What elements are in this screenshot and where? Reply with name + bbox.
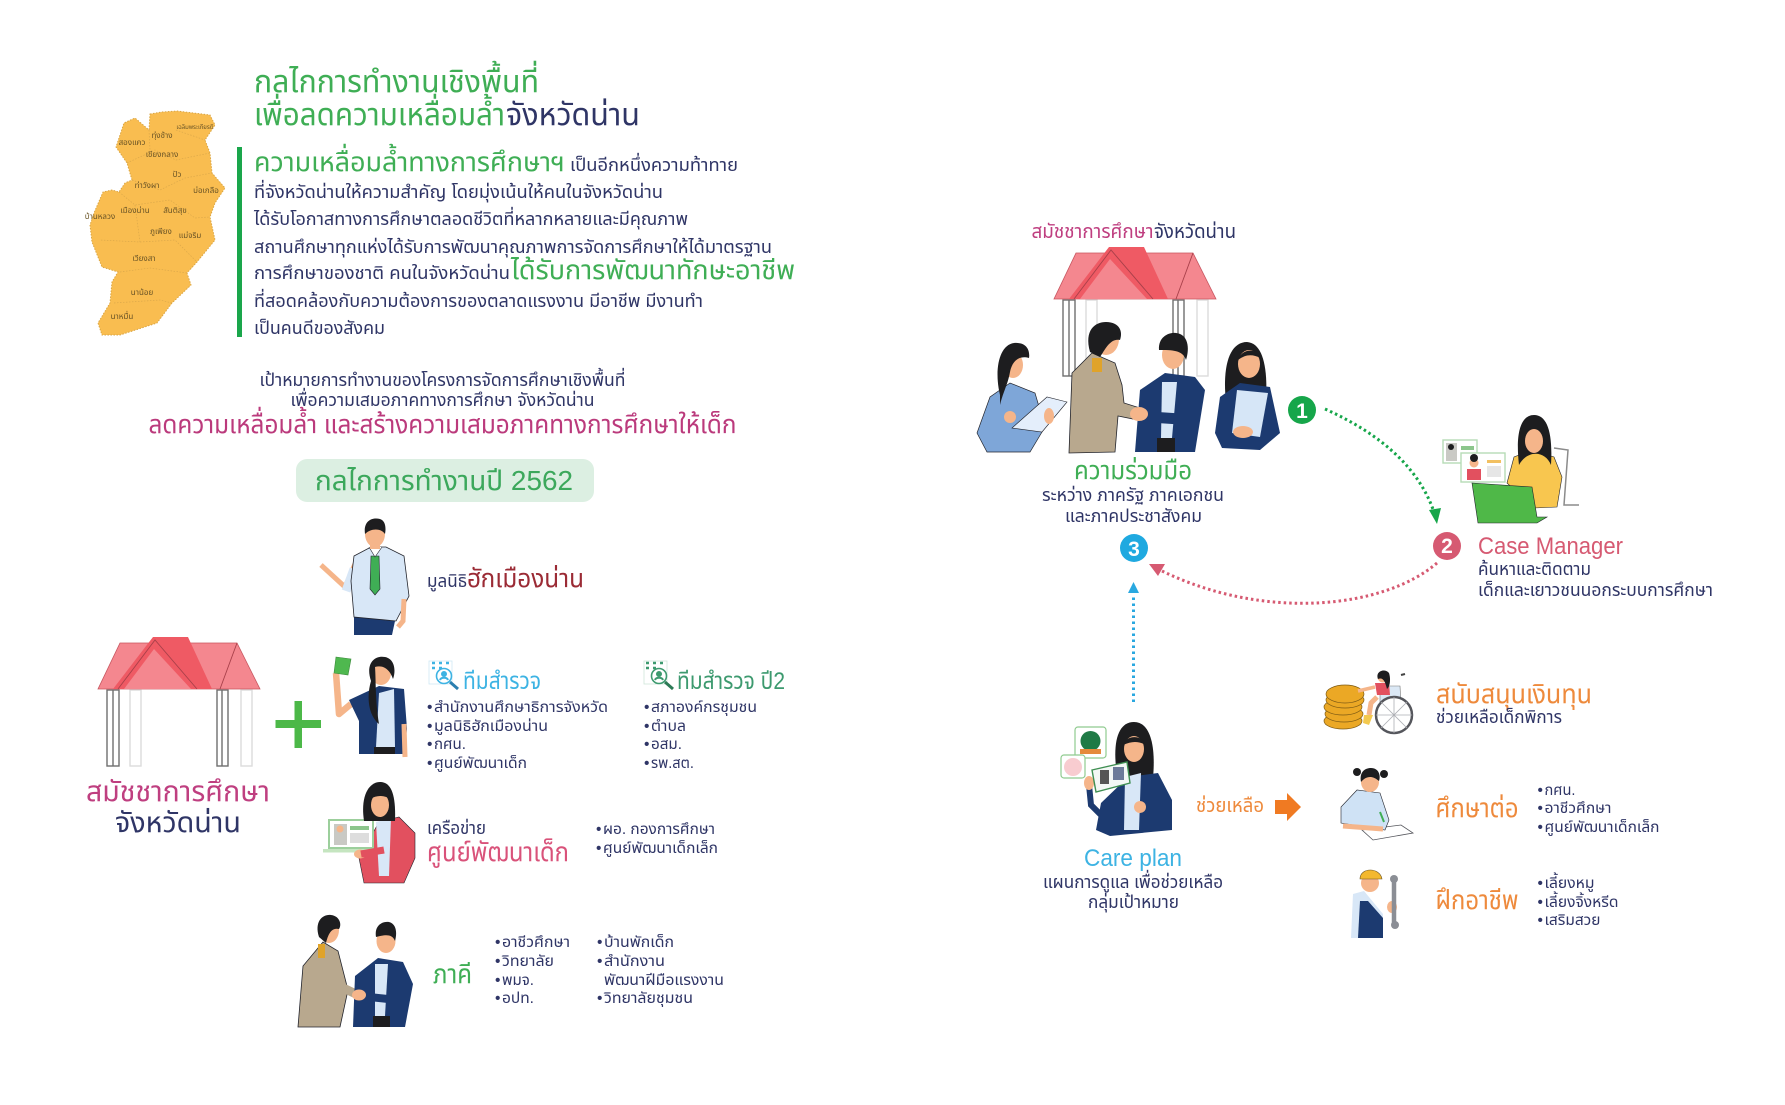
- goal statement: เป้าหมายการทำงานของโครงการจัดการศึกษาเชิงพื้นที่: [260, 367, 626, 390]
- text: child development center network: ศูนย์พัฒนาเด็ก: [427, 837, 569, 868]
- text: partners: •: [597, 934, 602, 951]
- text: collaboration: ระหว่าง ภาครัฐ ภาคเอกชน: [1042, 485, 1224, 505]
- person: foundation man: [321, 518, 409, 635]
- assembly label: [86, 776, 270, 839]
- text: partners: อาชีวศึกษา: [502, 934, 570, 951]
- label and arrow: help: ช่วยเหลือ: [1196, 794, 1264, 817]
- text: partners: พัฒนาฝีมือแรงงาน: [604, 972, 724, 989]
- text: partners: •: [495, 990, 500, 1007]
- text: collaboration: และภาคประชาสังคม: [1065, 506, 1202, 526]
- intro paragraph: เป็นคนดีของสังคม: [254, 318, 385, 338]
- person: woman with green card: [334, 657, 407, 757]
- icon: studying girl: [1341, 768, 1413, 840]
- title: เพื่อลดความเหลื่อมล้ำ: [254, 93, 505, 132]
- intro paragraph: ได้รับโอกาสทางการศึกษาตลอดชีวิตที่หลากหลายและมีคุณภาพ: [253, 206, 688, 230]
- map: Nan province districts: เชียงกลาง: [146, 149, 178, 159]
- text: collaboration: [1042, 455, 1224, 526]
- text: Hak Mueang Nan foundation: ฮักเมืองน่าน: [467, 563, 584, 593]
- survey team column 1: ศูนย์พัฒนาเด็ก: [434, 754, 527, 772]
- text: case manager: [1478, 533, 1713, 600]
- map: Nan province districts: เวียงสา: [132, 253, 156, 263]
- text: partners: •: [495, 972, 500, 989]
- intro paragraph: สถานศึกษาทุกแห่งได้รับการพัฒนาคุณภาพการจัดการศึกษาให้ได้มาตรฐาน: [254, 237, 772, 258]
- text: partners: •: [495, 934, 500, 951]
- intro paragraph: [253, 143, 795, 338]
- text: partners: อปท.: [502, 990, 534, 1007]
- heading: provincial assembly: [1032, 220, 1236, 243]
- map: Nan province districts: นาหมื่น: [111, 310, 133, 321]
- text: vocational training: •: [1538, 894, 1543, 911]
- arrow: step 2 to step 3: [1149, 563, 1437, 603]
- text: care plan: Care plan: [1084, 845, 1182, 872]
- survey team column 1: กศน.: [434, 736, 466, 753]
- text: continue studying: •: [1538, 819, 1543, 836]
- intro paragraph: การศึกษาของชาติ คนในจังหวัดน่าน: [254, 263, 510, 283]
- survey team column 2: •: [644, 755, 649, 772]
- person: woman with laptop: [323, 782, 415, 883]
- text: partners: [433, 933, 724, 1007]
- survey team column 2: ตำบล: [651, 718, 686, 735]
- title: กลไกการทำงานเชิงพื้นที่: [254, 60, 539, 99]
- text: partners: พมจ.: [502, 972, 534, 989]
- person: woman with clipboard: [977, 343, 1067, 452]
- map: Nan province districts: เฉลิมพระเกียรติ: [176, 124, 214, 131]
- survey team column 2: •: [644, 718, 649, 735]
- survey team column 1: •: [427, 699, 432, 716]
- icon: plus: [276, 701, 321, 748]
- survey team column 1: •: [427, 736, 432, 753]
- step 3 badge: 3: [1128, 538, 1140, 561]
- text: child development center network: •: [596, 821, 601, 838]
- text: partners: วิทยาลัยชุมชน: [604, 990, 693, 1007]
- map: Nan province districts: สองแคว: [119, 138, 145, 147]
- person: care plan woman: [1061, 722, 1172, 836]
- text: continue studying: •: [1538, 800, 1543, 817]
- icon: worker with wrench: [1351, 870, 1399, 938]
- text: child development center network: •: [596, 840, 601, 857]
- heading: provincial assembly: จังหวัดน่าน: [1154, 220, 1236, 243]
- pill heading: mechanism 2019: กลไกการทำงานปี 2562: [315, 465, 573, 496]
- survey team column 1: สำนักงานศึกษาธิการจังหวัด: [434, 699, 608, 716]
- text: continue studying: ศึกษาต่อ: [1436, 793, 1518, 823]
- step 1 badge: [1288, 396, 1316, 424]
- text: partners: •: [597, 990, 602, 1007]
- map: Nan province districts: ปัว: [173, 170, 181, 179]
- accent bar: [237, 147, 242, 337]
- icon: coins and wheelchair: [1324, 671, 1412, 733]
- survey team column 2: รพ.สต.: [651, 755, 694, 772]
- text: child development center network: ศูนย์พัฒนาเด็กเล็ก: [603, 839, 718, 857]
- text: vocational training: เสริมสวย: [1544, 912, 1600, 929]
- step 1 badge: 1: [1296, 400, 1308, 423]
- survey team column 2: ทีมสำรวจ ปี2: [677, 668, 785, 695]
- text: child development center network: เครือข่าย: [427, 818, 486, 838]
- arrow: care plan to step 3: [1128, 582, 1139, 702]
- text: continue studying: •: [1538, 782, 1543, 799]
- text: partners: •: [495, 953, 500, 970]
- person: woman with document: [1215, 342, 1280, 450]
- assembly label: สมัชชาการศึกษา: [86, 776, 270, 808]
- title: จังหวัดน่าน: [506, 97, 640, 132]
- map: Nan province districts: สันติสุข: [163, 206, 187, 215]
- survey team column 2: [644, 661, 785, 772]
- text: continue studying: อาชีวศึกษา: [1544, 800, 1612, 817]
- person: case manager: [1443, 415, 1579, 523]
- map: Nan province districts: [85, 111, 225, 335]
- step 2 badge: [1433, 532, 1461, 560]
- assembly label: จังหวัดน่าน: [115, 807, 241, 839]
- map: Nan province districts: ท่าวังผา: [135, 180, 159, 190]
- text: care plan: กลุ่มเป้าหมาย: [1088, 892, 1179, 913]
- text: care plan: แผนการดูแล เพื่อช่วยเหลือ: [1043, 869, 1223, 894]
- text: Hak Mueang Nan foundation: มูลนิธิ: [427, 571, 467, 593]
- step 2 badge: 2: [1441, 535, 1453, 558]
- text: vocational training: เลี้ยงจิ้งหรีด: [1544, 891, 1618, 911]
- map: Nan province districts: แม่จริม: [179, 230, 201, 240]
- survey team column 1: •: [427, 755, 432, 772]
- survey team column 1: •: [427, 718, 432, 735]
- step 3 badge: [1120, 534, 1148, 562]
- text: continue studying: [1436, 782, 1660, 836]
- text: vocational training: [1436, 872, 1618, 929]
- text: continue studying: กศน.: [1544, 782, 1576, 799]
- text: vocational training: ฝึกอาชีพ: [1436, 885, 1518, 915]
- survey team column 2: •: [644, 699, 649, 716]
- map: Nan province districts: บ้านหลวง: [85, 211, 115, 221]
- person: businessman: [1130, 333, 1205, 452]
- intro paragraph: ได้รับการพัฒนาทักษะอาชีพ: [510, 255, 795, 285]
- icon: survey magnifier green: [644, 661, 673, 689]
- pill heading: mechanism 2019: [296, 459, 594, 502]
- text: collaboration: ความร่วมมือ: [1074, 455, 1192, 485]
- text: partners: สำนักงาน: [604, 953, 665, 970]
- intro paragraph: ที่สอดคล้องกับความต้องการของตลาดแรงงาน มีอาชีพ มีงานทำ: [254, 288, 703, 311]
- person: handshake officer and businessman: [298, 915, 413, 1027]
- survey team column 2: สภาองค์กรชุมชน: [651, 699, 757, 716]
- text: partners: ภาคี: [433, 959, 472, 989]
- intro paragraph: ความเหลื่อมล้ำทางการศึกษาฯ: [254, 143, 565, 177]
- survey team column 1: [427, 661, 608, 772]
- survey team column 1: มูลนิธิฮักเมืองน่าน: [434, 717, 548, 735]
- text: care plan: [1043, 845, 1223, 913]
- icon: assembly house: [98, 637, 260, 766]
- survey team column 1: ทีมสำรวจ: [463, 668, 541, 695]
- text: continue studying: ศูนย์พัฒนาเด็กเล็ก: [1544, 818, 1660, 836]
- text: partners: บ้านพักเด็ก: [604, 933, 674, 951]
- text: vocational training: เลี้ยงหมู: [1544, 872, 1594, 892]
- label and arrow: help: [1196, 793, 1301, 821]
- text: child development center network: ผอ. กองการศึกษา: [603, 821, 715, 838]
- survey team column 2: •: [644, 736, 649, 753]
- arrow: step 1 to step 2: [1325, 409, 1441, 524]
- map: Nan province districts: เมืองน่าน: [120, 205, 150, 215]
- title: [254, 60, 640, 132]
- text: case manager: เด็กและเยาวชนนอกระบบการศึกษา: [1478, 580, 1713, 600]
- map: Nan province districts: นาน้อย: [131, 287, 153, 297]
- intro paragraph: เป็นอีกหนึ่งความท้าทาย: [570, 152, 738, 175]
- text: partners: •: [597, 953, 602, 970]
- map: Nan province districts: ทุ่งช้าง: [151, 130, 173, 140]
- text: child development center network: [427, 818, 718, 868]
- text: case manager: ค้นหาและติดตาม: [1478, 559, 1591, 579]
- heading: provincial assembly: สมัชชาการศึกษา: [1032, 221, 1154, 243]
- text: vocational training: •: [1538, 875, 1543, 892]
- text: case manager: Case Manager: [1478, 533, 1623, 560]
- text: funding support: สนับสนุนเงินทุน: [1436, 679, 1592, 710]
- goal statement: [148, 367, 736, 439]
- text: funding support: [1436, 679, 1592, 727]
- map: Nan province districts: ภูเพียง: [150, 226, 172, 237]
- survey team column 2: อสม.: [651, 736, 682, 753]
- goal statement: ลดความเหลื่อมล้ำ และสร้างความเสมอภาคทางการศึกษาให้เด็ก: [148, 406, 736, 439]
- goal statement: เพื่อความเสมอภาคทางการศึกษา จังหวัดน่าน: [290, 387, 594, 410]
- icon: survey magnifier blue: [429, 661, 458, 689]
- icon: assembly house small: [1054, 247, 1216, 376]
- intro paragraph: ที่จังหวัดน่านให้ความสำคัญ โดยมุ่งเน้นให้คนในจังหวัดน่าน: [254, 179, 663, 203]
- text: partners: วิทยาลัย: [502, 953, 554, 970]
- people: collaboration group: [977, 322, 1280, 453]
- map: Nan province districts: บ่อเกลือ: [193, 185, 219, 195]
- person: officer: [1069, 322, 1140, 453]
- text: vocational training: •: [1538, 912, 1543, 929]
- text: funding support: ช่วยเหลือเด็กพิการ: [1436, 707, 1562, 727]
